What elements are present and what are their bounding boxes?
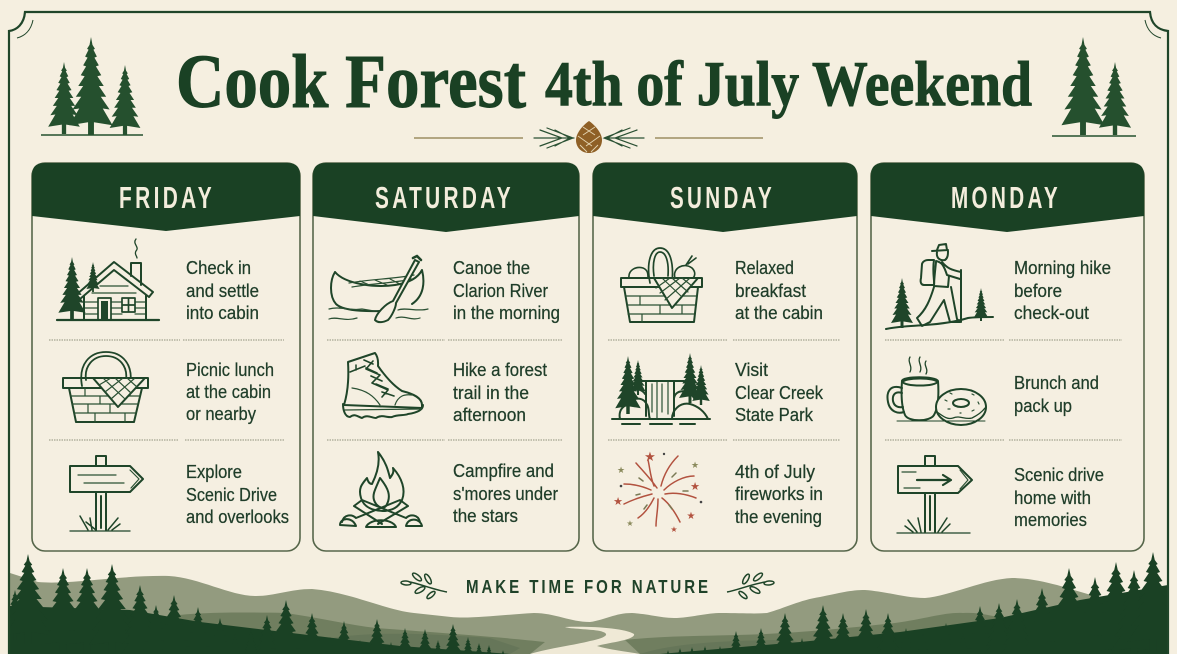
text: clear creek: Visit xyxy=(735,359,768,380)
back hills xyxy=(10,573,1168,654)
Saturday heading: SATURDAY xyxy=(375,180,514,215)
Monday heading: MONDAY xyxy=(951,180,1061,215)
stars: ★ xyxy=(644,450,656,465)
text: campfire: the stars xyxy=(453,505,518,526)
title: Cook Forest xyxy=(176,40,526,124)
icon: signpost with arrow xyxy=(897,456,972,533)
icon: pinecone xyxy=(576,121,602,153)
text: relaxed breakfast: at the cabin xyxy=(735,302,823,323)
icon: canoe and paddle xyxy=(329,256,428,322)
stars xyxy=(613,450,702,534)
text: picnic lunch: Picnic lunch xyxy=(186,359,274,380)
icon: picnic basket xyxy=(63,352,148,422)
text: explore xyxy=(186,461,289,527)
text: canoe: in the morning xyxy=(453,302,560,323)
stars: ★ xyxy=(670,525,678,534)
text: canoe xyxy=(453,257,560,323)
text: brunch: pack up xyxy=(1014,395,1072,416)
text: morning hike: before xyxy=(1014,280,1062,301)
icon: waterfall and trees xyxy=(612,353,710,424)
icon: breakfast basket xyxy=(621,248,702,322)
text: morning hike xyxy=(1014,257,1111,323)
forest ground xyxy=(10,585,1168,654)
text: explore: Explore xyxy=(186,461,242,482)
text: check in: and settle xyxy=(186,280,259,301)
footer tagline with sprigs xyxy=(401,572,774,600)
text: explore: Scenic Drive xyxy=(186,484,277,505)
panel: Saturday xyxy=(313,163,579,551)
text: campfire xyxy=(453,460,558,526)
panel: Monday xyxy=(871,163,1144,551)
text: relaxed breakfast: Relaxed xyxy=(735,257,794,278)
stars: ★ xyxy=(691,461,699,471)
text: scenic drive xyxy=(1014,464,1104,530)
icon: fireworks xyxy=(613,450,702,534)
title: 4th of July Weekend xyxy=(545,48,1032,119)
title ornament: lines, pine branches and pinecone xyxy=(414,121,763,153)
icon: hiking boot xyxy=(343,353,423,418)
text: picnic lunch xyxy=(186,359,274,424)
text: brunch xyxy=(1014,372,1099,416)
text: fireworks: fireworks in xyxy=(735,483,823,504)
landscape: hills, river and forest xyxy=(2,552,1177,654)
text: check in xyxy=(186,257,259,323)
icon: campfire xyxy=(340,452,422,527)
near hills xyxy=(334,634,796,654)
text: check in: into cabin xyxy=(186,302,259,323)
text: hike: Hike a forest xyxy=(453,359,547,380)
panel: Friday xyxy=(32,163,300,551)
text: picnic lunch: or nearby xyxy=(186,403,257,424)
text: scenic drive: memories xyxy=(1014,509,1087,530)
icon: hiker xyxy=(886,244,993,329)
text: relaxed breakfast xyxy=(735,257,823,323)
stars: ★ xyxy=(613,495,623,508)
text: morning hike: Morning hike xyxy=(1014,257,1111,278)
icon: signpost xyxy=(70,456,143,531)
text: scenic drive: home with xyxy=(1014,487,1091,508)
text: morning hike: check-out xyxy=(1014,302,1089,323)
icon: right sprig xyxy=(727,572,774,600)
text: canoe: Clarion River xyxy=(453,280,548,301)
text: brunch: Brunch and xyxy=(1014,372,1099,393)
river xyxy=(530,627,640,654)
text: check in: Check in xyxy=(186,257,251,278)
text: relaxed breakfast: breakfast xyxy=(735,280,806,301)
header trees left xyxy=(41,37,143,135)
Monday header banner xyxy=(871,163,1144,232)
text: scenic drive: Scenic drive xyxy=(1014,464,1104,485)
text: picnic lunch: at the cabin xyxy=(186,381,271,402)
text: hike: trail in the xyxy=(453,382,529,403)
text: clear creek: State Park xyxy=(735,404,814,425)
stars: ★ xyxy=(617,466,625,476)
text: hike xyxy=(453,359,547,425)
text: fireworks xyxy=(735,461,823,527)
icon: log cabin xyxy=(57,239,159,320)
icon: left sprig xyxy=(401,572,447,600)
Friday header banner xyxy=(32,163,300,231)
text: clear creek: Clear Creek xyxy=(735,382,824,403)
stars: ★ xyxy=(626,519,634,528)
text: clear creek xyxy=(735,359,824,425)
text: hike: afternoon xyxy=(453,404,526,425)
header trees right xyxy=(1052,37,1136,136)
stars: ★ xyxy=(687,511,696,522)
Friday heading: FRIDAY xyxy=(119,180,215,215)
text: campfire: s'mores under xyxy=(453,483,558,504)
tagline: MAKE TIME FOR NATURE xyxy=(466,577,711,597)
panel: Sunday xyxy=(593,163,857,551)
icon: coffee mug and donut xyxy=(888,357,986,425)
text: campfire: Campfire and xyxy=(453,460,554,481)
text: canoe: Canoe the xyxy=(453,257,530,278)
Saturday header banner xyxy=(313,163,579,232)
text: explore: and overlooks xyxy=(186,506,289,527)
mid hills xyxy=(160,613,1060,654)
right tree line xyxy=(663,552,1177,654)
title xyxy=(176,40,1032,124)
stars: ★ xyxy=(690,480,700,493)
Sunday heading: SUNDAY xyxy=(670,180,775,215)
Sunday header banner xyxy=(593,163,857,232)
text: fireworks: 4th of July xyxy=(735,461,816,482)
left tree line xyxy=(2,554,508,654)
text: fireworks: the evening xyxy=(735,506,822,527)
